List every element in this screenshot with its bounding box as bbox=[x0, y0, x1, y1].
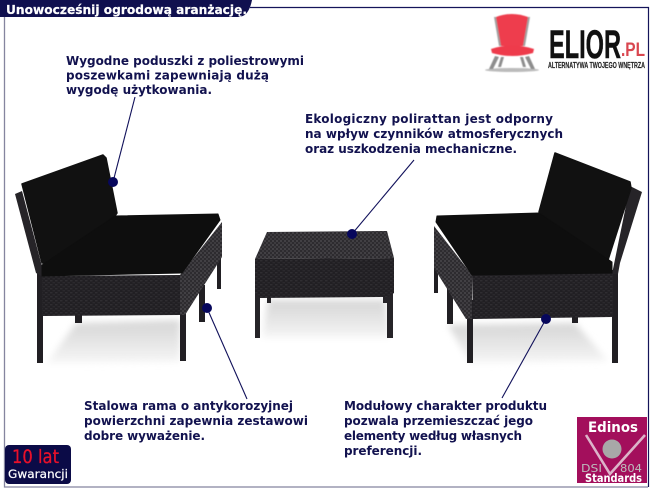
leader line bbox=[502, 319, 546, 398]
cushions bbox=[539, 153, 631, 260]
right sofa module bbox=[434, 153, 642, 363]
left sofa module bbox=[15, 155, 222, 363]
callout: steel frame bbox=[84, 303, 308, 443]
text block: elementy według własnych bbox=[344, 429, 522, 443]
callout: cushions bbox=[66, 54, 304, 187]
badge: Edinos standards: Standards bbox=[585, 471, 642, 485]
text block: preferencji. bbox=[344, 444, 422, 458]
legs bbox=[255, 290, 393, 338]
marker bbox=[541, 314, 551, 324]
text block: Modułowy charakter produktu bbox=[344, 399, 547, 413]
text block: dobre wyważenie. bbox=[84, 429, 205, 443]
callout: polyrattan bbox=[305, 112, 563, 239]
badge: warranty: Gwarancji bbox=[8, 467, 68, 481]
text block: pozwala przemieszczać jego bbox=[344, 414, 533, 428]
front panel bbox=[255, 258, 394, 298]
badge: Edinos standards: DSI bbox=[581, 462, 602, 475]
text block: oraz uszkodzenia mechaniczne. bbox=[305, 142, 517, 156]
cushions bbox=[22, 155, 117, 263]
text block: na wpływ czynników atmosferycznych bbox=[305, 127, 563, 141]
shadow bbox=[448, 323, 608, 363]
leader line bbox=[352, 160, 414, 234]
badge: Edinos standards: Edinos bbox=[588, 420, 638, 436]
badge: warranty: 10 lat bbox=[12, 446, 59, 468]
callout: modular bbox=[344, 314, 551, 458]
wicker frame bbox=[15, 191, 43, 277]
tabletop bbox=[255, 231, 394, 259]
text block: wygodę użytkowania. bbox=[66, 83, 212, 97]
leader line bbox=[207, 308, 247, 399]
text block: Stalowa rama o antykorozyjnej bbox=[84, 399, 293, 413]
text block: Wygodne poduszki z poliestrowymi bbox=[66, 54, 304, 68]
leader line bbox=[113, 97, 135, 182]
marker bbox=[347, 229, 357, 239]
text block: poszewkami zapewniają dużą bbox=[66, 68, 269, 82]
legs bbox=[434, 255, 618, 363]
shadow bbox=[262, 300, 390, 338]
badge: warranty bbox=[5, 445, 71, 484]
table bbox=[255, 231, 394, 338]
marker bbox=[202, 303, 212, 313]
badge: Edinos standards: 804 bbox=[620, 462, 642, 475]
badge: Edinos standards bbox=[577, 417, 647, 485]
logo domain: .PL bbox=[621, 40, 645, 61]
icon: red chair bbox=[485, 14, 539, 72]
wicker frame bbox=[612, 186, 642, 274]
title banner: Unowocześnij ogrodową aranżację. bbox=[6, 2, 247, 17]
logo: Elior bbox=[485, 14, 645, 72]
text block: powierzchni zapewnia zestawowi bbox=[84, 414, 308, 428]
text block: Ekologiczny polirattan jest odporny bbox=[305, 112, 553, 126]
legs bbox=[37, 250, 221, 363]
shadow bbox=[47, 320, 180, 363]
marker bbox=[108, 177, 118, 187]
